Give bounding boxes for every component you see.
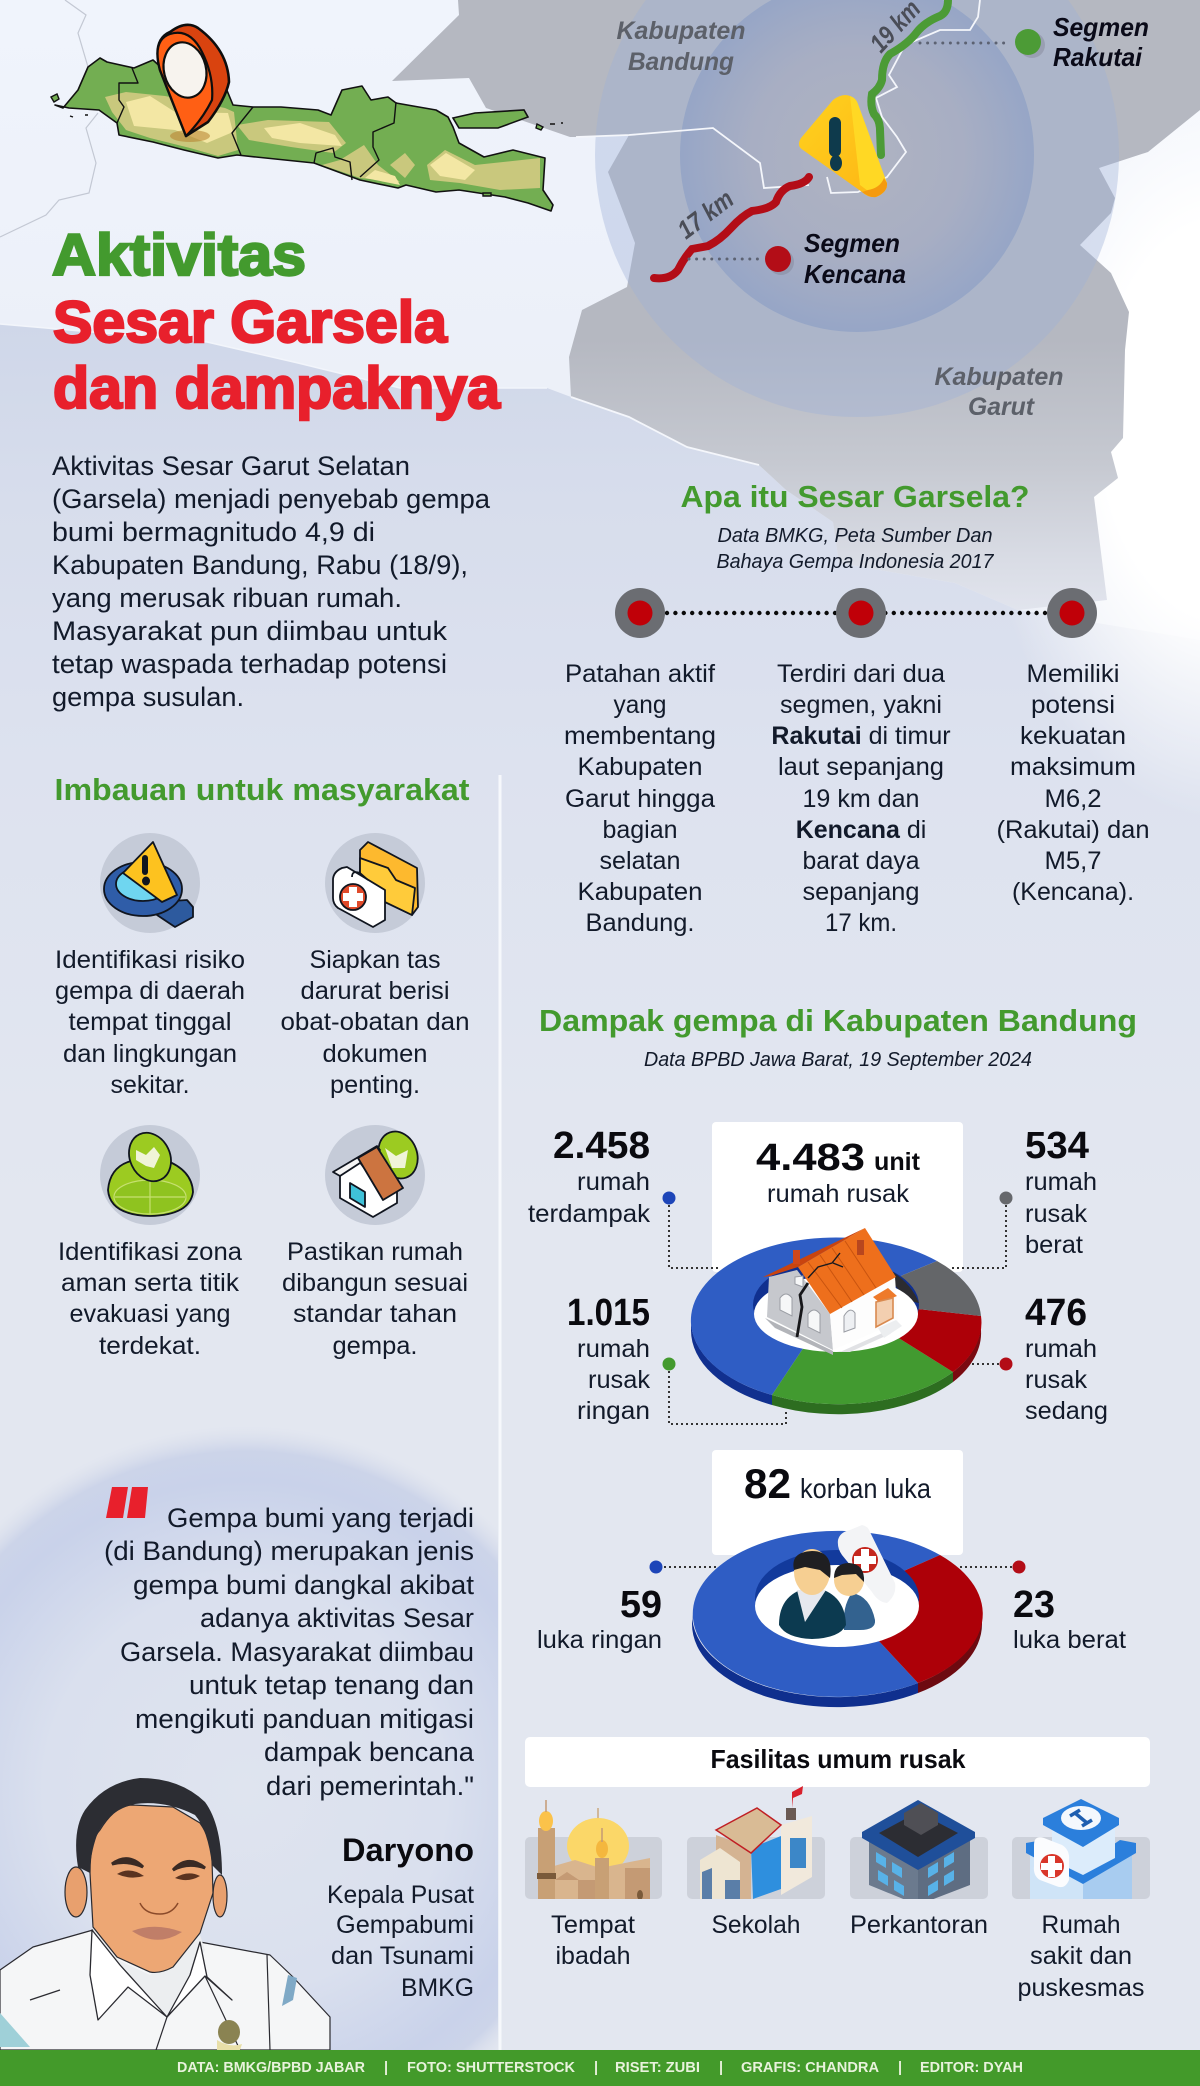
stat: luka berat	[957, 1560, 1126, 1654]
callout: Segmen Kencana	[689, 228, 906, 289]
icon: first aid kit and folder	[325, 833, 425, 933]
column 3 text: M6,2	[1044, 785, 1102, 813]
stat: luka berat: luka berat	[1013, 1626, 1126, 1654]
stat: rusak ringan	[567, 1292, 786, 1425]
label: Rumah	[1042, 1911, 1120, 1939]
footer credits bar: |	[594, 2060, 598, 2076]
heading: Dampak gempa di Kabupaten Bandung	[539, 1003, 1137, 1038]
stat: rusak sedang: sedang	[1025, 1397, 1108, 1425]
heading box	[525, 1737, 1150, 1787]
facility: Sekolah	[687, 1786, 825, 1939]
intro paragraph: tetap waspada terhadap potensi	[52, 649, 447, 679]
intro paragraph: yang merusak ribuan rumah.	[52, 583, 402, 613]
stat: rusak berat: 534	[1025, 1125, 1089, 1167]
text: Identifikasi risiko	[55, 946, 245, 974]
stat: rumah terdampak: 2.458	[553, 1125, 650, 1167]
icon: quake-proof house	[325, 1125, 425, 1225]
text: gempa di daerah	[55, 977, 245, 1005]
label: puskesmas	[1018, 1974, 1144, 2002]
title: Sesar Garsela	[53, 290, 448, 355]
impact circles	[595, 0, 1119, 417]
column 1 text: membentang	[564, 722, 716, 750]
label: Kabupaten Bandung: Bandung	[628, 48, 734, 76]
title: Aktivitas	[52, 223, 306, 288]
heading: Apa itu Sesar Garsela?	[680, 479, 1030, 514]
stat: rusak sedang: rusak	[1025, 1366, 1087, 1394]
stat: rumah terdampak	[528, 1125, 720, 1268]
text: dokumen	[322, 1040, 428, 1068]
icon: quotation mark	[106, 1487, 148, 1518]
injured card: 82	[744, 1460, 791, 1507]
text: Pastikan rumah	[287, 1238, 463, 1266]
icon: office building	[862, 1800, 975, 1905]
stat: rusak berat: rumah	[1025, 1168, 1097, 1196]
injured card: korban luka	[800, 1473, 931, 1504]
quote text	[104, 1503, 475, 1801]
speaker title: dan Tsunami	[331, 1942, 474, 1970]
column 1 text	[564, 660, 716, 937]
total houses card	[712, 1122, 963, 1272]
callout: Segmen Kencana: Kencana	[804, 259, 906, 289]
column 2 text: 17 km.	[825, 909, 897, 937]
intro paragraph	[52, 451, 490, 712]
location pin	[158, 25, 229, 142]
column 1 text: Kabupaten	[578, 878, 702, 906]
text	[55, 946, 245, 1099]
column 3 text: Memiliki	[1026, 660, 1120, 688]
callout: Segmen Kencana: Segmen	[804, 228, 900, 258]
column 1 text: yang	[614, 691, 666, 719]
text: darurat berisi	[300, 977, 450, 1005]
stat: rusak berat: rusak	[1025, 1200, 1087, 1228]
column 3 text: kekuatan	[1020, 722, 1126, 750]
quote text: Garsela. Masyarakat diimbau	[120, 1637, 474, 1667]
panel: Imbauan untuk masyarakat	[54, 772, 470, 1360]
chart: damaged houses donut	[691, 1228, 981, 1414]
tip: identifikasi risiko	[55, 833, 245, 1099]
chart: injured donut	[692, 1525, 983, 1707]
text: penting.	[330, 1071, 420, 1099]
column 3 text: (Kencana).	[1012, 878, 1134, 906]
intro paragraph: Kabupaten Bandung, Rabu (18/9),	[52, 550, 468, 580]
map of Java	[51, 25, 563, 211]
tip: rumah tahan gempa	[282, 1125, 468, 1360]
panel: Fasilitas umum rusak	[525, 1737, 1150, 2002]
panel: Dampak gempa	[0, 1003, 1200, 2086]
label: Kabupaten Garut	[934, 363, 1064, 421]
text: gempa.	[332, 1332, 418, 1360]
facility: Tempat ibadah	[525, 1800, 662, 1970]
text	[58, 1238, 242, 1360]
total houses card: 4.483	[756, 1137, 865, 1179]
stat: luka berat: 23	[1013, 1584, 1055, 1626]
label: Perkantoran	[850, 1911, 988, 1939]
footer credits bar: GRAFIS: CHANDRA	[741, 2060, 880, 2076]
label: ibadah	[556, 1942, 630, 1970]
stat: rusak ringan: ringan	[577, 1397, 650, 1425]
label: Kabupaten Bandung	[616, 17, 746, 76]
quote text: gempa bumi dangkal akibat	[133, 1570, 475, 1600]
footer credits bar: RISET: ZUBI	[615, 2060, 700, 2076]
text	[282, 1238, 468, 1360]
label	[1018, 1911, 1144, 2002]
column 1 text: selatan	[600, 847, 680, 875]
footer credits bar: EDITOR: DYAH	[920, 2060, 1023, 2076]
quote text: Gempa bumi yang terjadi	[167, 1503, 474, 1533]
quote text: dari pemerintah."	[266, 1771, 474, 1801]
stat: luka ringan: luka ringan	[537, 1626, 662, 1654]
callout: Segmen Rakutai: Rakutai	[1053, 42, 1143, 72]
column 3 text	[996, 660, 1150, 906]
column 1 text: Kabupaten	[578, 753, 702, 781]
region shapes	[392, 0, 1200, 610]
label: Kabupaten Garut: Kabupaten	[934, 363, 1064, 391]
column 1 text: Bandung.	[586, 909, 694, 937]
icon: safe zone globe	[100, 1125, 200, 1225]
column 2 text: laut sepanjang	[778, 753, 944, 781]
footer credits bar: FOTO: SHUTTERSTOCK	[407, 2060, 576, 2076]
speaker title: BMKG	[401, 1974, 474, 2002]
stat: rusak berat: berat	[1025, 1231, 1083, 1259]
stat: rusak sedang	[969, 1292, 1108, 1425]
text	[280, 946, 470, 1099]
subheading: Data BPBD Jawa Barat, 19 September 2024	[644, 1049, 1032, 1071]
text: tempat tinggal	[68, 1008, 232, 1036]
label: Kabupaten Bandung: Kabupaten	[616, 17, 746, 45]
subheading	[716, 525, 994, 573]
column 2 text: barat daya	[802, 847, 920, 875]
quote text: dampak bencana	[264, 1737, 474, 1767]
panel: quote	[0, 1487, 475, 2050]
district boundary	[571, 0, 980, 465]
column 2 text	[771, 660, 951, 937]
text: dan lingkungan	[63, 1040, 237, 1068]
intro paragraph: Masyarakat pun diimbau untuk	[52, 616, 448, 646]
quote text: untuk tetap tenang dan	[189, 1670, 474, 1700]
text: Siapkan tas	[310, 946, 440, 974]
callout: Segmen Rakutai	[920, 12, 1149, 72]
subheading: Bahaya Gempa Indonesia 2017	[716, 551, 994, 573]
column 2 text: 19 km dan	[802, 785, 920, 813]
quote text: adanya aktivitas Sesar	[200, 1603, 474, 1633]
text: obat-obatan dan	[280, 1008, 470, 1036]
column 2 text: Kencana di	[796, 816, 926, 844]
icon: hospital	[1026, 1799, 1136, 1905]
stat: rusak ringan: rusak	[588, 1366, 650, 1394]
heading box: Fasilitas umum rusak	[710, 1744, 966, 1774]
column 3 text: (Rakutai) dan	[996, 816, 1150, 844]
label: Tempat	[551, 1911, 635, 1939]
portrait of Daryono	[0, 1778, 330, 2050]
column 1 text: bagian	[602, 816, 678, 844]
stat: luka ringan	[537, 1560, 718, 1654]
injured card	[712, 1450, 963, 1555]
facility: Rumah sakit dan puskesmas	[1012, 1799, 1150, 2002]
timeline	[615, 588, 1097, 638]
speaker name: Daryono	[342, 1832, 474, 1868]
stat: rumah terdampak: rumah	[577, 1168, 650, 1196]
icon: cracked house	[763, 1228, 902, 1355]
footer credits bar: DATA: BMKG/BPBD JABAR	[177, 2060, 366, 2076]
column 3 text: M5,7	[1044, 847, 1102, 875]
text: terdekat.	[99, 1332, 201, 1360]
title: dan dampaknya	[53, 356, 501, 421]
tip: zona aman	[58, 1125, 242, 1360]
speaker title	[327, 1881, 474, 2002]
text: aman serta titik	[61, 1269, 240, 1297]
quote text: (di Bandung) merupakan jenis	[104, 1536, 474, 1566]
intro paragraph: gempa susulan.	[52, 682, 244, 712]
speaker title: Kepala Pusat	[327, 1881, 474, 1909]
stat: rumah terdampak: terdampak	[528, 1200, 651, 1228]
panel: Apa itu Sesar Garsela	[564, 479, 1150, 937]
stat: luka ringan: 59	[620, 1584, 662, 1626]
speaker title: Gempabumi	[336, 1911, 474, 1939]
text: Identifikasi zona	[58, 1238, 242, 1266]
fault line: Rakutai	[871, 0, 948, 155]
warning sign	[799, 95, 887, 197]
footer credits bar	[0, 2050, 1200, 2086]
label: Sekolah	[712, 1911, 800, 1939]
text: dibangun sesuai	[282, 1269, 468, 1297]
intro paragraph: Aktivitas Sesar Garut Selatan	[52, 451, 410, 481]
label: 17 km: 17 km	[672, 184, 739, 245]
icon: magnifier with warning	[100, 833, 200, 933]
footer credits bar: |	[719, 2060, 723, 2076]
label: sakit dan	[1030, 1942, 1132, 1970]
text: sekitar.	[110, 1071, 190, 1099]
stat: rusak ringan: rumah	[577, 1335, 650, 1363]
footer credits bar: |	[898, 2060, 902, 2076]
text: evakuasi yang	[70, 1300, 230, 1328]
icon: injured people with medical sign	[779, 1525, 895, 1639]
column 1 text: Garut hingga	[565, 785, 715, 813]
fault line: Kencana	[654, 177, 809, 278]
quote text: mengikuti panduan mitigasi	[135, 1704, 474, 1734]
label: Kabupaten Garut: Garut	[968, 393, 1036, 421]
column 1 text: Patahan aktif	[565, 660, 715, 688]
icon: school	[700, 1786, 812, 1899]
column 3 text: maksimum	[1010, 753, 1136, 781]
stat: rusak ringan: 1.015	[567, 1292, 650, 1334]
column 2 text: sepanjang	[802, 878, 920, 906]
column 3 text: potensi	[1031, 691, 1115, 719]
intro paragraph: (Garsela) menjadi penyebab gempa	[52, 484, 490, 514]
callout: Segmen Rakutai: Segmen	[1053, 12, 1149, 42]
column 2 text: Rakutai di timur	[771, 722, 951, 750]
facility: Perkantoran	[850, 1800, 988, 1939]
column 2 text: Terdiri dari dua	[777, 660, 945, 688]
heading: Imbauan: Imbauan untuk masyarakat	[54, 772, 470, 807]
map: fault location	[392, 0, 1200, 610]
total houses card: rumah rusak	[767, 1180, 909, 1208]
footer credits bar: |	[384, 2060, 388, 2076]
column 2 text: segmen, yakni	[780, 691, 942, 719]
stat: rusak sedang: rumah	[1025, 1335, 1097, 1363]
text: standar tahan	[293, 1300, 457, 1328]
title	[52, 223, 501, 421]
stat: rusak sedang: 476	[1025, 1292, 1087, 1334]
subheading: Data BMKG, Peta Sumber Dan	[718, 525, 992, 547]
icon: mosque	[537, 1800, 650, 1900]
stat: rusak berat	[950, 1125, 1097, 1268]
total houses card: unit	[874, 1148, 921, 1176]
tip: tas darurat	[280, 833, 470, 1099]
intro paragraph: bumi bermagnitudo 4,9 di	[52, 517, 375, 547]
label	[551, 1911, 635, 1970]
